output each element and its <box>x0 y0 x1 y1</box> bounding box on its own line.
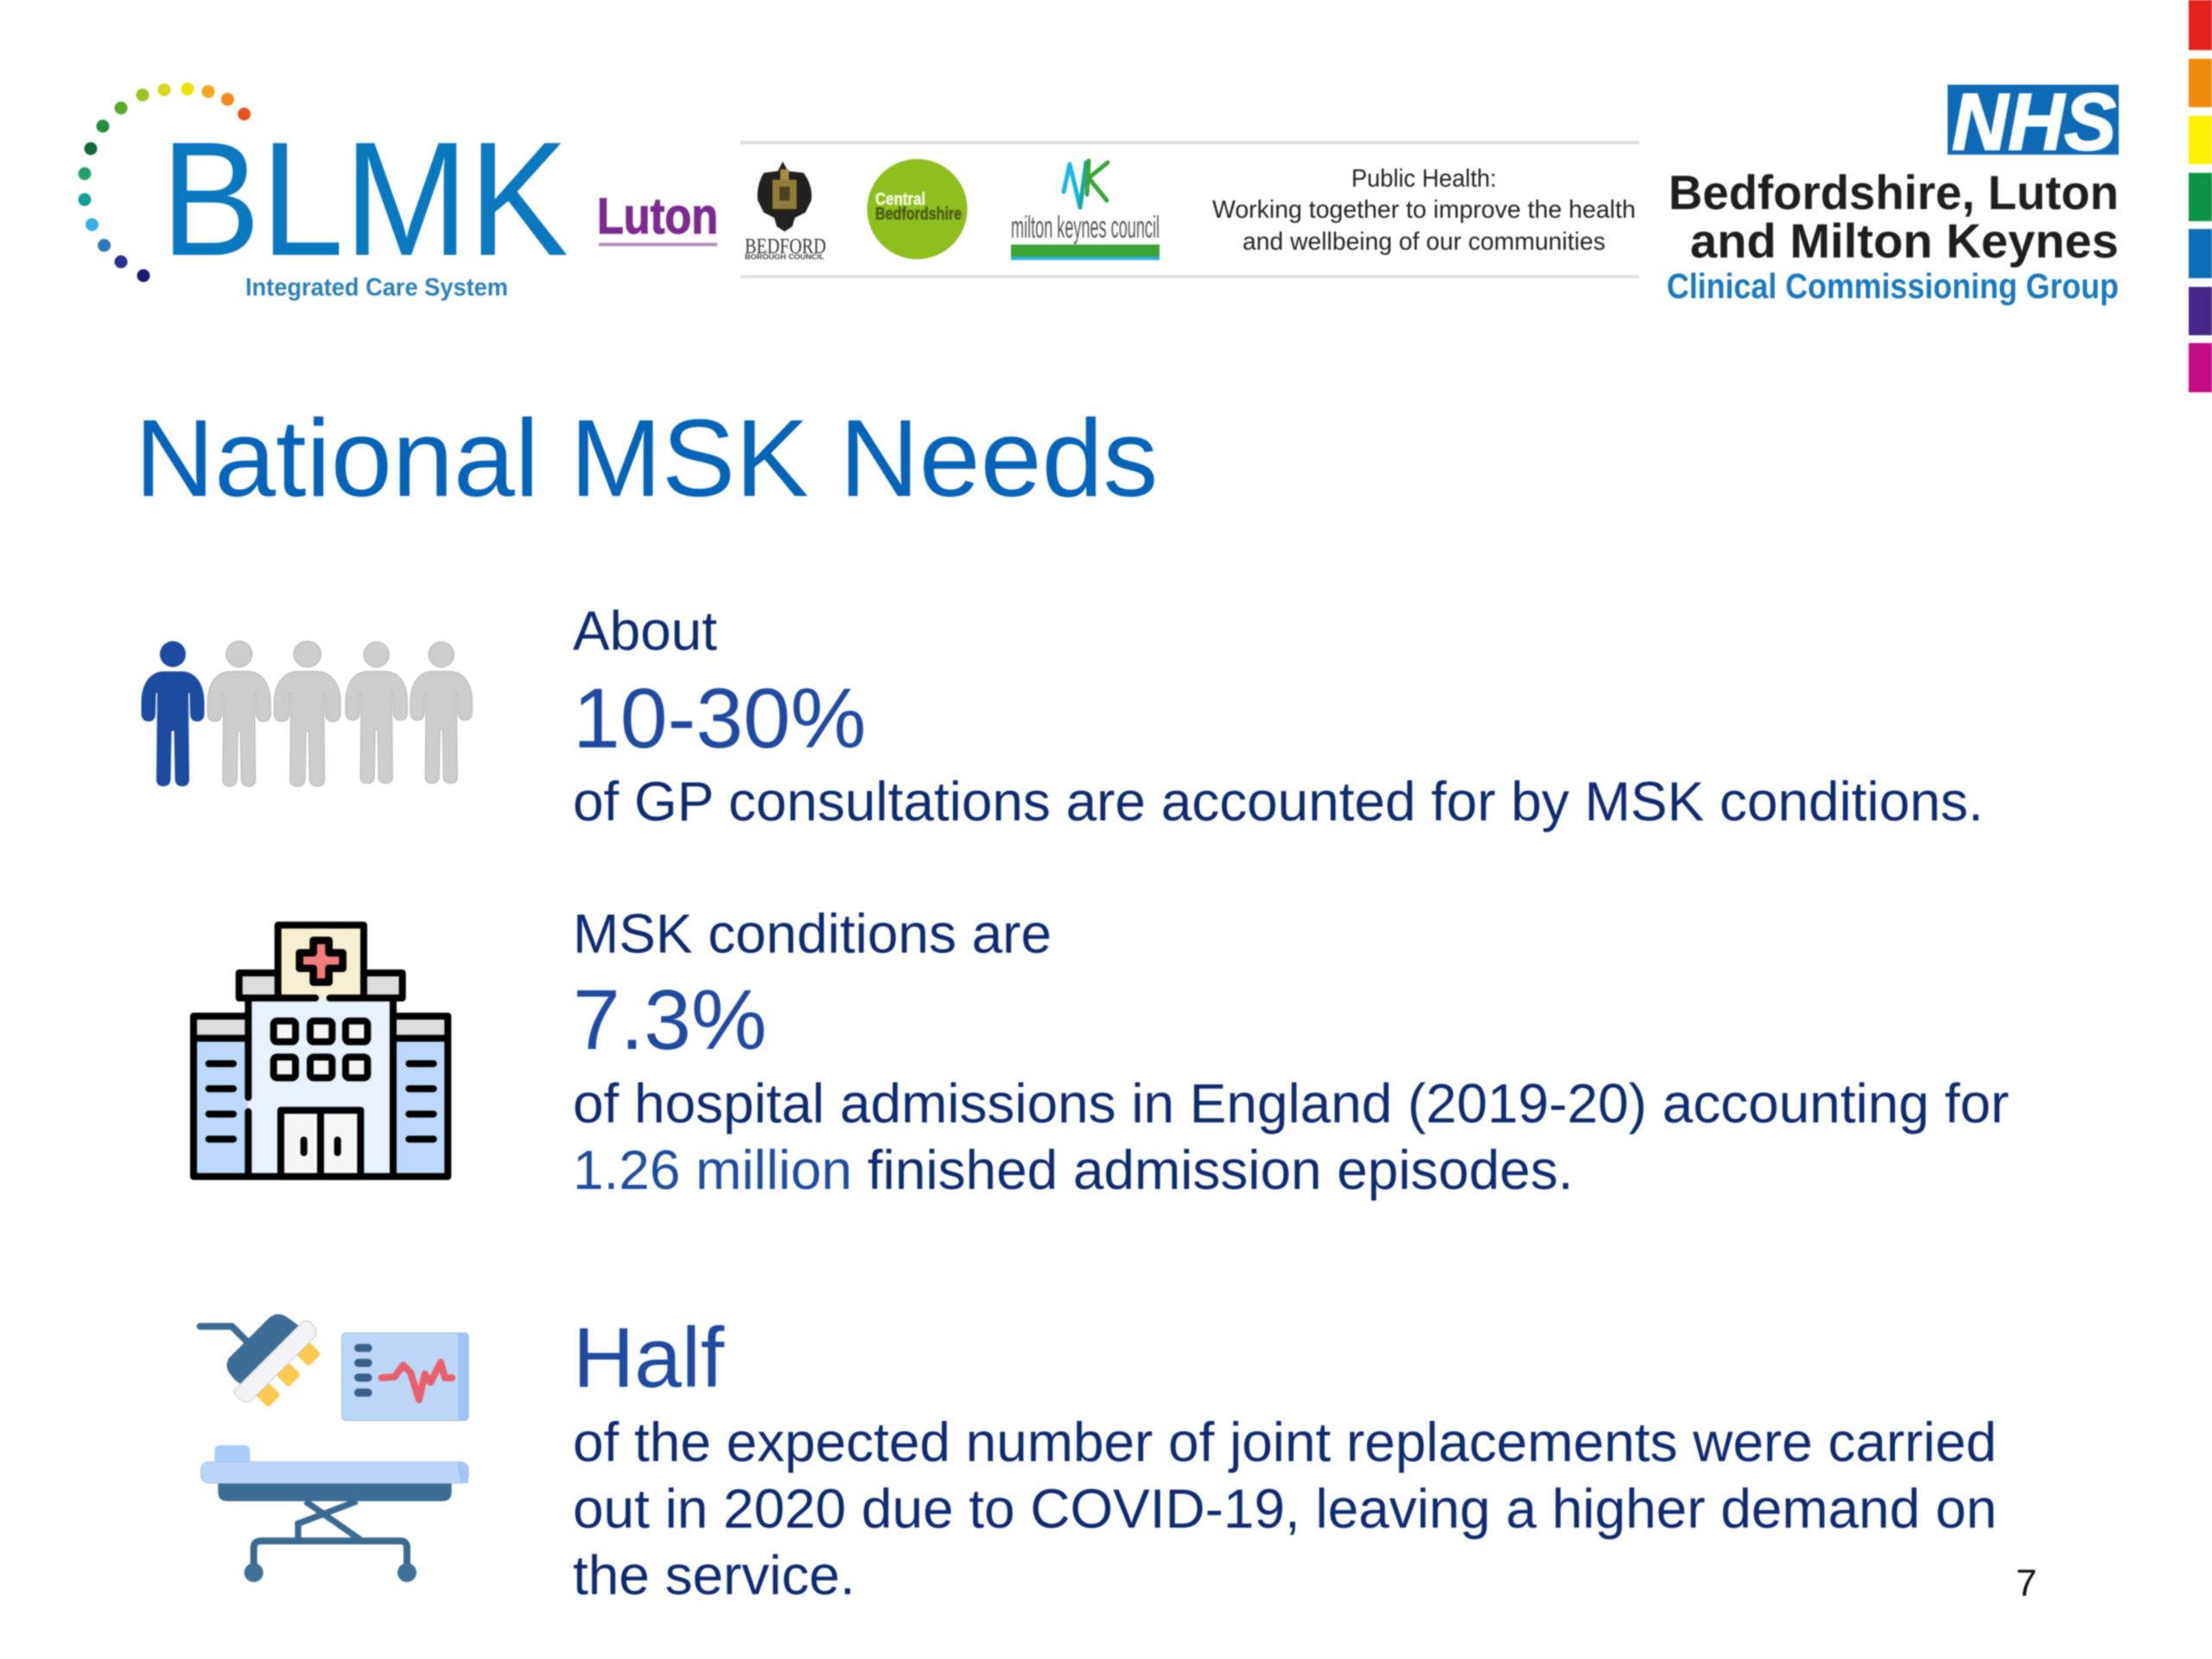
logo: Bedford Borough Council: BEDFORD <box>745 235 826 258</box>
logo: NHS Bedfordshire, Luton and Milton Keynes CCG: Clinical Commissioning Group <box>1667 266 2119 306</box>
text block: GP consultations <box>573 600 1984 833</box>
Integrated Care System caption: Integrated Care System <box>245 274 508 302</box>
text block: joint replacements: the service. <box>573 1544 855 1606</box>
logo: Bedford Borough Council: BOROUGH COUNCIL <box>745 253 824 261</box>
text block: joint replacements <box>573 1310 1997 1606</box>
logo: NHS Bedfordshire, Luton and Milton Keynes CCG: Bedfordshire, Luton <box>1669 165 2119 219</box>
logo: Central Bedfordshire <box>868 159 968 259</box>
logo: BLMK Integrated Care System <box>78 83 569 302</box>
text block: GP consultations: of GP consultations are accounted for by MSK conditions. <box>573 771 1984 833</box>
icon: MK mark <box>1064 161 1108 207</box>
text block: joint replacements: of the expected number of joint replacements were carried <box>573 1411 1997 1473</box>
logo: NHS Bedfordshire, Luton and Milton Keynes CCG <box>1667 77 2119 306</box>
logo: Central Bedfordshire: Bedfordshire <box>875 205 962 224</box>
logo: Milton Keynes Council <box>1011 161 1160 260</box>
NHS lozenge: NHS <box>1952 77 2116 167</box>
public health strapline: Public Health: <box>1351 165 1497 193</box>
logo: Luton: Luton <box>597 188 718 245</box>
public health strapline: Working together to improve the health <box>1212 196 1636 224</box>
page number: 7 <box>2016 1562 2037 1605</box>
text block: hospital admissions: of hospital admissions in England (2019-20) accounting for <box>573 1072 2009 1135</box>
monitor <box>342 1333 468 1421</box>
BLMK wordmark: BLMK <box>161 108 569 289</box>
logo: Bedford Borough Council <box>745 162 826 261</box>
divider band around council logos <box>741 141 1639 278</box>
rainbow colour strip <box>2189 0 2212 392</box>
text block: hospital admissions <box>573 902 2009 1201</box>
text block: hospital admissions: MSK conditions are <box>573 902 1052 964</box>
icon: scanner, monitor and bed <box>200 1314 468 1582</box>
public health strapline <box>1212 165 1636 256</box>
text block: hospital admissions: 1.26 million finished admission episodes. <box>573 1139 1573 1201</box>
text block: joint replacements: out in 2020 due to COVID-19, leaving a higher demand on <box>573 1478 1997 1540</box>
logo: Milton Keynes Council: milton keynes council <box>1011 209 1160 245</box>
text block: joint replacements: Half <box>573 1310 725 1405</box>
icon: Bedford crest <box>758 162 811 232</box>
icon: five people, one highlighted <box>142 641 472 786</box>
text block: GP consultations: About <box>573 600 717 662</box>
icon: hospital <box>194 925 448 1177</box>
public health strapline: and wellbeing of our communities <box>1243 228 1605 256</box>
text block: hospital admissions: 7.3% <box>573 972 767 1067</box>
icon: rainbow dot arc <box>78 83 251 282</box>
scanner probe <box>200 1314 321 1408</box>
title: National MSK Needs <box>135 397 1158 520</box>
logo: NHS Bedfordshire, Luton and Milton Keynes CCG: and Milton Keynes <box>1690 213 2119 268</box>
logo: Central Bedfordshire: Central <box>875 190 925 209</box>
bed <box>200 1446 468 1582</box>
text block: GP consultations: 10-30% <box>573 671 867 766</box>
